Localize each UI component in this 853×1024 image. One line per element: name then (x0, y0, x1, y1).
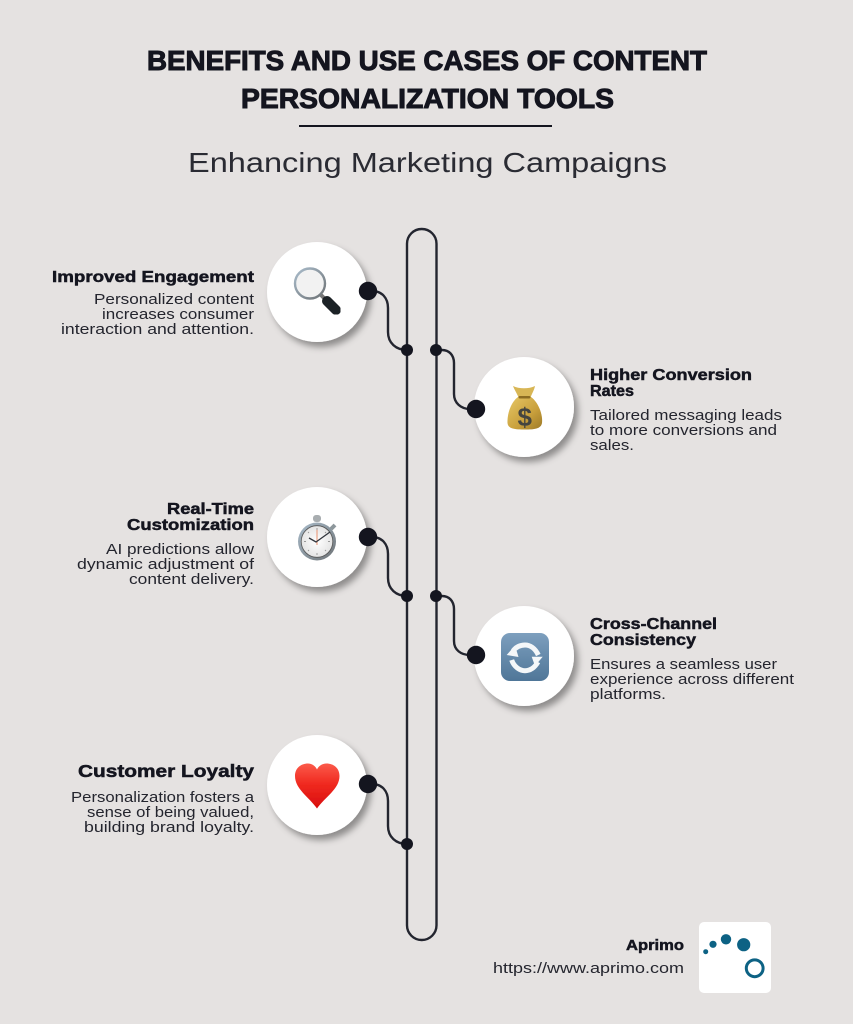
text: higher conversion rates: Higher Conversion (590, 367, 752, 384)
text: real-time customization: Customization (127, 517, 254, 534)
text: higher conversion rates: Tailored messaging leads (590, 408, 782, 424)
icon circle: sync arrows (474, 606, 574, 706)
text: higher conversion rates (590, 367, 782, 454)
icon circle: stopwatch (267, 487, 367, 587)
subtitle: Enhancing Marketing Campaigns (188, 147, 667, 178)
text: customer loyalty: Customer Loyalty (78, 761, 254, 781)
connector: cross-channel consistency (430, 590, 485, 664)
title: PERSONALIZATION TOOLS (241, 83, 614, 114)
text: improved engagement: Personalized content (94, 292, 254, 308)
text: improved engagement: Improved Engagement (52, 269, 255, 286)
text: higher conversion rates: to more conversions and (590, 423, 777, 439)
title (147, 45, 707, 114)
text: real-time customization (77, 501, 255, 588)
panel: real-time customization (77, 487, 413, 602)
panel: higher conversion rates (430, 344, 782, 457)
panel: cross-channel consistency (430, 590, 794, 706)
text: customer loyalty (71, 761, 255, 836)
connector: improved engagement (359, 282, 413, 356)
icon circle: money bag (474, 357, 574, 457)
source credit: https://www.aprimo.com (493, 960, 684, 977)
connector: customer loyalty (359, 775, 413, 850)
icon circle: money bag: $ (517, 402, 532, 432)
text: cross-channel consistency: Cross-Channel (590, 616, 717, 633)
icon circle: magnifying glass (267, 242, 367, 342)
text: real-time customization: Real-Time (167, 501, 254, 518)
text: cross-channel consistency: experience across different (590, 672, 794, 688)
text: improved engagement: increases consumer (102, 307, 254, 323)
text: cross-channel consistency (590, 616, 794, 703)
panel: customer loyalty (71, 735, 413, 850)
text: higher conversion rates: sales. (590, 438, 634, 454)
text: improved engagement (52, 269, 255, 338)
connector: higher conversion rates (430, 344, 485, 418)
text: real-time customization: content delivery. (129, 572, 254, 588)
central timeline track (407, 229, 436, 940)
text: higher conversion rates: Rates (590, 383, 634, 400)
text: cross-channel consistency: Consistency (590, 632, 696, 649)
source credit: Aprimo (626, 937, 684, 954)
icon circle: heart (267, 735, 367, 835)
text: real-time customization: dynamic adjustment of (77, 557, 255, 573)
text: customer loyalty: sense of being valued, (87, 805, 254, 821)
text: customer loyalty: Personalization fosters a (71, 790, 255, 806)
text: customer loyalty: building brand loyalty. (84, 820, 254, 836)
title: BENEFITS AND USE CASES OF CONTENT (147, 45, 707, 76)
source credit (493, 937, 684, 977)
text: improved engagement: interaction and attention. (61, 322, 254, 338)
logo: Aprimo (699, 922, 771, 993)
text: real-time customization: AI predictions allow (106, 542, 255, 558)
text: cross-channel consistency: platforms. (590, 687, 666, 703)
text: cross-channel consistency: Ensures a seamless user (590, 657, 777, 673)
connector: real-time customization (359, 528, 413, 602)
panel: improved engagement (52, 242, 413, 356)
